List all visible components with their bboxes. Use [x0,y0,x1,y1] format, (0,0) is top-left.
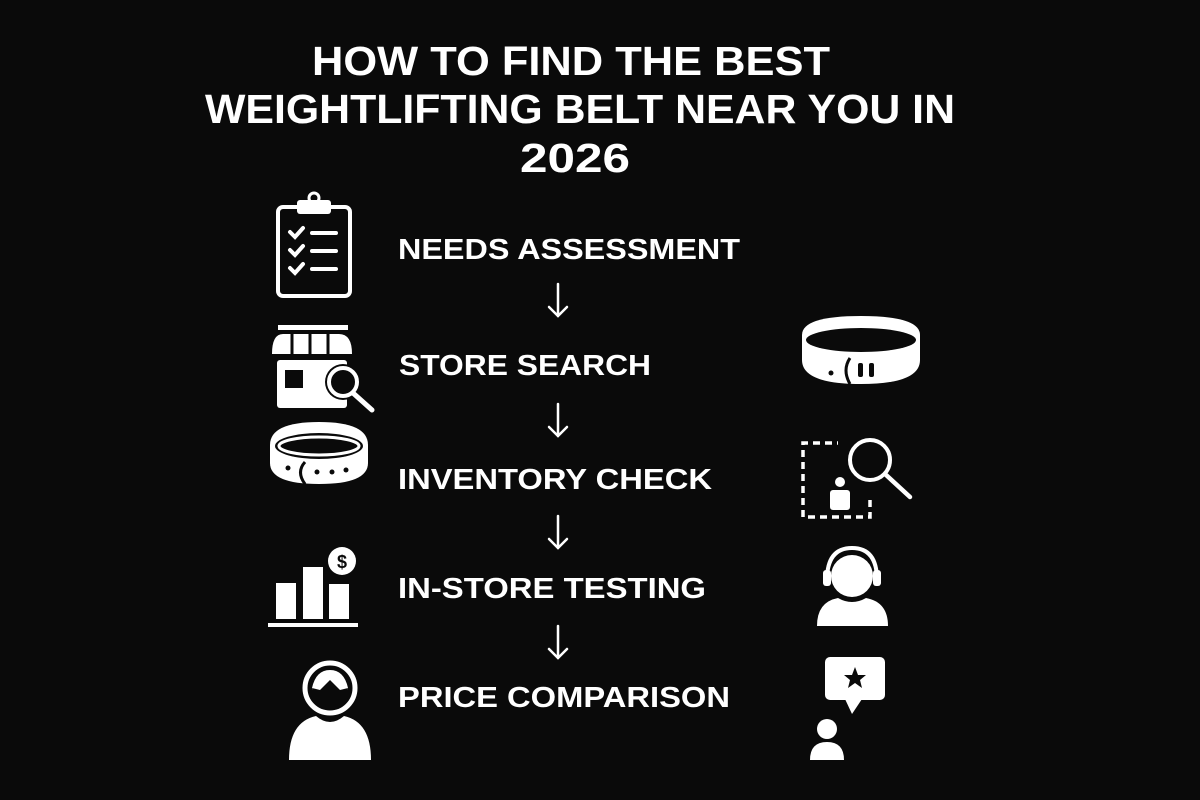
arrow 3 [549,516,567,548]
icon: review person [810,657,885,760]
title [205,38,955,181]
icon: clipboard [278,193,350,296]
label: needs assessment: NEEDS ASSESSMENT [398,234,740,266]
label: price comparison: PRICE COMPARISON [398,682,730,714]
label: in-store testing: IN-STORE TESTING [398,573,706,605]
icon: bar chart with dollar: $ [337,552,347,572]
arrows [549,284,567,658]
arrow 4 [549,626,567,658]
arrow 1 [549,284,567,316]
icon: dashed search [803,440,910,517]
icon: bar chart with dollar [268,547,358,627]
icon: store with magnifier [272,325,372,410]
title: 2026 [520,135,630,181]
title: WEIGHTLIFTING BELT NEAR YOU IN [205,86,955,132]
icon: belt left [270,422,368,484]
icon: belt right [802,316,920,384]
title: HOW TO FIND THE BEST [312,38,830,84]
icon: person left [289,663,371,760]
label: inventory check: INVENTORY CHECK [398,464,712,496]
label: store search: STORE SEARCH [399,350,651,382]
step labels [398,234,740,714]
icon: headset person [817,548,888,626]
arrow 2 [549,404,567,436]
